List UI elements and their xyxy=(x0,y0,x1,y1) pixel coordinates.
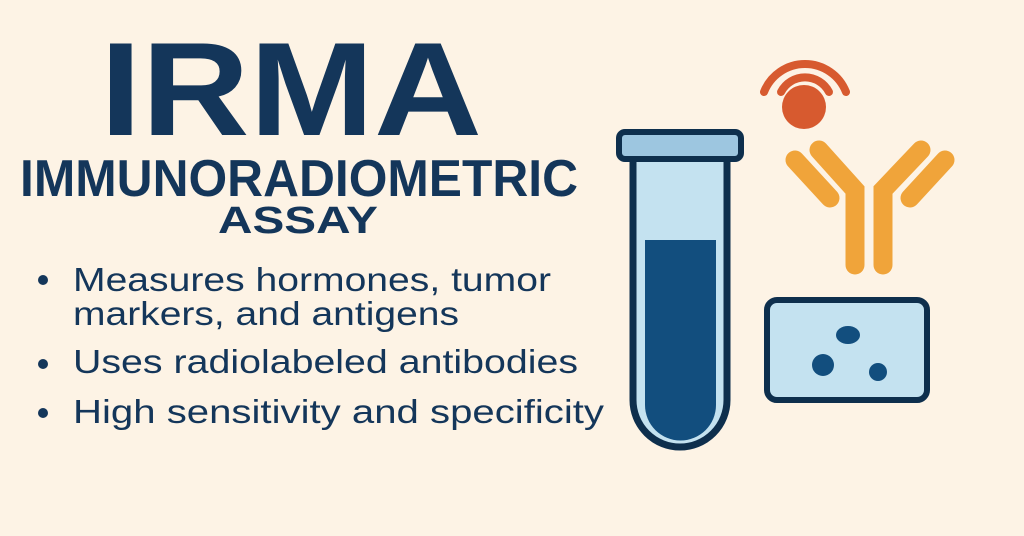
icon: antibody xyxy=(795,150,945,265)
icon: sample slide xyxy=(767,300,927,400)
icon: test tube xyxy=(619,132,741,447)
bullet list: markers, and antigens xyxy=(73,295,459,332)
bullet list xyxy=(38,261,605,430)
subtitle xyxy=(20,150,578,242)
subtitle: IMMUNORADIOMETRIC xyxy=(20,150,578,208)
icon: radioactive signal xyxy=(764,64,846,129)
bullet list: Uses radiolabeled antibodies xyxy=(73,343,578,380)
title: IRMA: IRMA xyxy=(100,16,482,164)
subtitle: ASSAY xyxy=(218,200,378,242)
bullet list: High sensitivity and specificity xyxy=(73,393,605,430)
bullet list: Measures hormones, tumor xyxy=(73,261,551,298)
